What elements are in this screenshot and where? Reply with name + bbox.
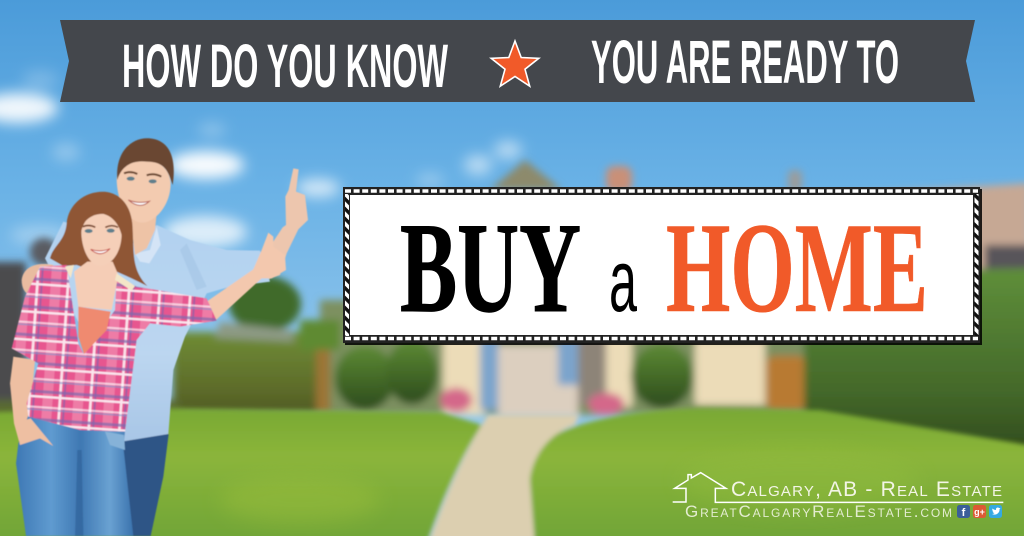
woman's neck and chest [74, 262, 118, 310]
woman [10, 192, 286, 536]
lawn [0, 408, 1024, 536]
man's eyes and smile [124, 172, 161, 205]
box shadow [345, 189, 982, 345]
brand name: Calgary, AB - Real Estate [731, 478, 1002, 501]
woman's hanging arm [10, 357, 53, 447]
man's raised arm and thumb [263, 168, 308, 280]
icon: facebook [957, 505, 970, 519]
buy a home title box [343, 187, 982, 345]
icon: google plus [973, 505, 986, 518]
woman's outstretched arm and hand [207, 233, 286, 320]
website url: GreatCalgaryRealEstate.com [685, 502, 952, 521]
icon: orange star [491, 41, 539, 86]
woman's coral top [78, 307, 111, 354]
top ribbon banner [60, 20, 975, 102]
man's head [117, 159, 171, 223]
man's jeans [76, 434, 169, 536]
icon: house outline [673, 473, 1003, 502]
house and garden [0, 160, 1024, 470]
word: buy: BUY [400, 196, 581, 339]
woman's eyes and smile [83, 225, 118, 254]
man's shirt [45, 222, 270, 442]
icon: facebook: f [962, 507, 966, 519]
woman's hair [50, 192, 147, 286]
man's hair [117, 138, 174, 185]
man's hand on shoulder [22, 264, 57, 295]
striped frame [343, 187, 980, 343]
couple giving thumbs up [10, 138, 308, 536]
white panel [350, 195, 973, 335]
icon: google plus: g+ [974, 507, 985, 517]
woman's face [81, 214, 122, 266]
word: a: a [609, 231, 637, 330]
heading: how do you know: HOW DO YOU KNOW [122, 32, 448, 100]
woman's jeans [16, 415, 133, 536]
clouds [0, 70, 522, 248]
woman's fringe [79, 205, 125, 240]
logo: great calgary real estate [673, 473, 1003, 521]
woman's hand in pocket [15, 418, 53, 446]
man's neck [130, 213, 157, 255]
woman's plaid shirt [12, 265, 217, 432]
woman's collar [65, 265, 135, 291]
man [45, 138, 308, 536]
icon: twitter [989, 505, 1002, 518]
